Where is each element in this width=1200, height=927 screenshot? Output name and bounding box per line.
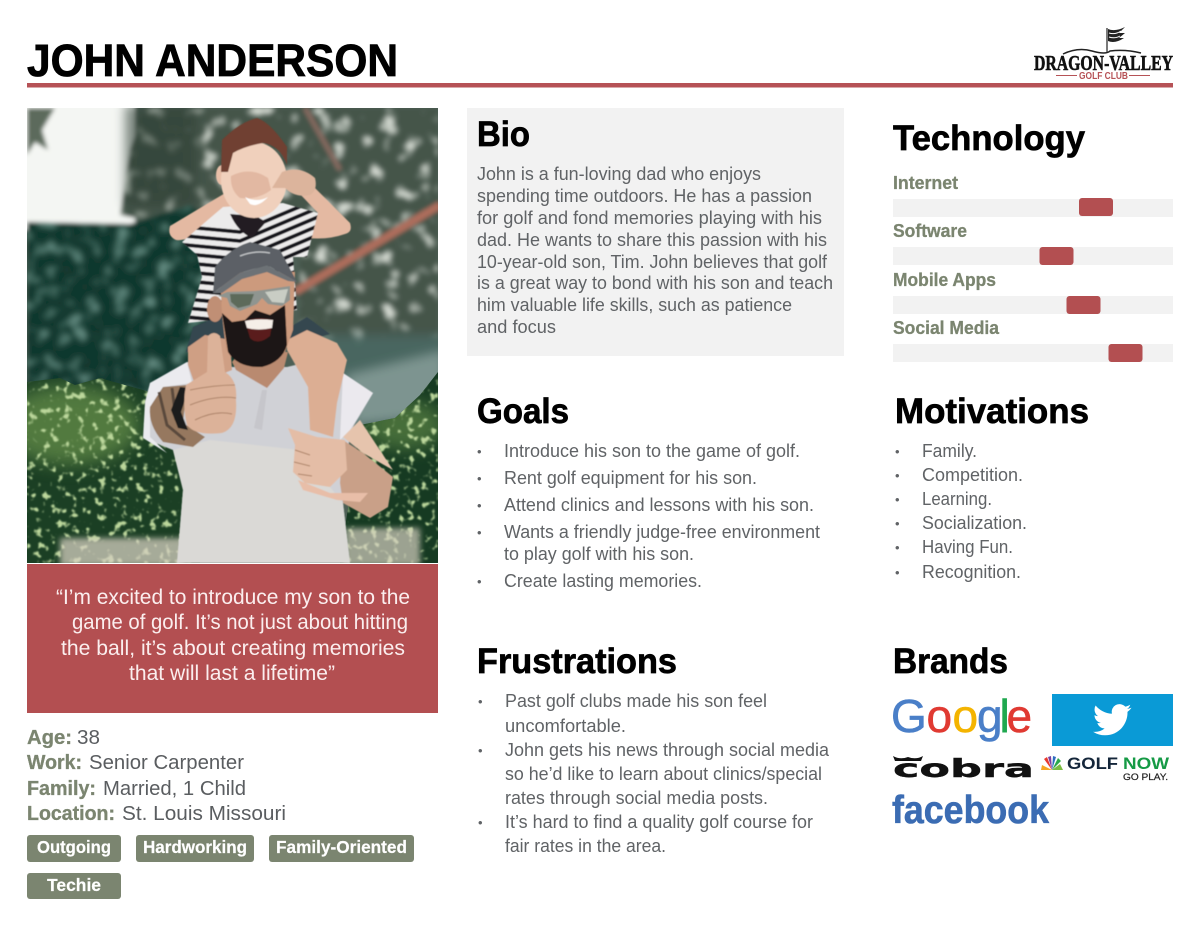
goals list: Attend clinics and lessons with his son.: [504, 494, 814, 515]
frustrations list: uncomfortable.: [505, 715, 626, 736]
quote text: “I’m excited to introduce my son to the: [56, 586, 410, 609]
father's sleeve: [143, 362, 192, 453]
demographics: Location:: [27, 803, 115, 825]
photo: father with son on shoulders: [27, 108, 438, 563]
motivations list: Socialization.: [922, 512, 1027, 533]
father's shirt: [149, 361, 371, 537]
quote text: game of golf. It’s not just about hitting: [72, 611, 408, 634]
brands heading: Brands: [893, 641, 1008, 681]
slider: Mobile Apps: [893, 296, 1173, 314]
bio text: 10-year-old son, Tim. John believes that golf: [477, 251, 828, 272]
brand: Google: e: [1006, 690, 1032, 742]
motivations list: Family.: [922, 440, 977, 461]
motivations list: •: [895, 492, 900, 507]
icon: flag: [1063, 27, 1141, 54]
tag: Outgoing: Outgoing: [37, 837, 111, 857]
bio heading: Bio: [477, 114, 530, 154]
frustrations heading: Frustrations: [477, 641, 677, 681]
motivations list: •: [895, 540, 900, 555]
father's right sleeve: [340, 373, 373, 440]
brand: Cobra: [893, 754, 1034, 783]
brand: Facebook: facebook: [892, 789, 1049, 832]
bio text: [477, 163, 833, 337]
frustrations list: John gets his news through social media: [505, 739, 830, 760]
photo background: [27, 108, 438, 563]
neck: [232, 352, 288, 388]
son: [169, 118, 351, 331]
tag: Outgoing: [27, 835, 121, 862]
label: Software: Software: [893, 221, 967, 241]
quote text: [56, 586, 410, 685]
bio text: for golf and fond memories playing with his: [477, 207, 822, 228]
frustrations list: Past golf clubs made his son feel: [505, 690, 767, 711]
tag: Hardworking: [136, 835, 254, 862]
motivations list: •: [895, 516, 900, 531]
tag: Family-Oriented: Family-Oriented: [276, 837, 407, 857]
frustrations list: rates through social media posts.: [505, 787, 768, 808]
frustrations list: [478, 690, 830, 856]
brand: Twitter: [1052, 694, 1173, 746]
motivations list: Having Fun.: [922, 536, 1013, 557]
slider: Social Media: [893, 344, 1173, 362]
tag: Techie: Techie: [47, 875, 101, 895]
brand: Google: G: [891, 690, 927, 742]
brand: Google: l: [1000, 690, 1010, 742]
goals list: Rent golf equipment for his son.: [504, 467, 757, 488]
bio text: dad. He wants to share this passion with his: [477, 229, 827, 250]
bio text: him valuable life skills, such as patience: [477, 294, 792, 315]
goals list: •: [477, 444, 482, 459]
demographics: Family:: [27, 778, 96, 800]
demographics: Work:: [27, 752, 82, 774]
brand: GolfNow: NOW: [1123, 754, 1170, 773]
shirt placket: [254, 390, 266, 430]
panel: bio: [467, 108, 844, 356]
tag: Techie: [27, 873, 121, 899]
foreground bushes: [0, 370, 445, 566]
motivations list: Competition.: [922, 464, 1023, 485]
technology heading: Technology: [893, 118, 1085, 158]
demographics: 38: [77, 727, 100, 749]
son's shorts: [186, 315, 330, 352]
goals list: •: [477, 471, 482, 486]
label: Social Media: Social Media: [893, 318, 1000, 338]
motivations list: •: [895, 468, 900, 483]
demographics: [27, 727, 286, 825]
bio text: and focus: [477, 316, 556, 337]
label: Internet: Internet: [893, 173, 958, 193]
son's right thigh and shin: [287, 330, 347, 437]
brand: Google: g: [977, 690, 1003, 742]
goals list: •: [477, 498, 482, 513]
brand: Google: o: [926, 690, 952, 742]
father's upper arm: [343, 420, 393, 470]
demographics: Age:: [27, 727, 72, 749]
demographics: Senior Carpenter: [89, 752, 244, 774]
header rule: [27, 83, 1173, 88]
frustrations list: •: [478, 694, 483, 709]
quote text: the ball, it’s about creating memories: [61, 637, 405, 660]
label: Mobile Apps: Mobile Apps: [893, 270, 996, 290]
frustrations list: so he’d like to learn about clinics/special: [505, 763, 822, 784]
frustrations list: •: [478, 743, 483, 758]
goals list: Introduce his son to the game of golf.: [504, 440, 800, 461]
logo subline: GOLF CLUB: [1079, 71, 1128, 82]
frustrations list: •: [478, 815, 483, 830]
icon: bird: [1093, 704, 1131, 735]
goals list: Wants a friendly judge-free environment: [504, 521, 820, 542]
motivations list: [895, 440, 1027, 582]
quote text: that will last a lifetime”: [129, 662, 335, 685]
brand: GolfNow: [1041, 754, 1170, 783]
father's head: [207, 242, 297, 367]
goals list: to play golf with his son.: [504, 543, 694, 564]
motivations list: Recognition.: [922, 561, 1021, 582]
slider: Software: [893, 247, 1173, 265]
bio text: John is a fun-loving dad who enjoys: [477, 163, 761, 184]
bio text: spending time outdoors. He has a passion: [477, 185, 812, 206]
motivations heading: Motivations: [895, 391, 1089, 431]
goals list: •: [477, 525, 482, 540]
demographics: St. Louis Missouri: [122, 803, 286, 825]
motivations list: •: [895, 444, 900, 459]
brand: GolfNow: GOLF: [1067, 754, 1118, 773]
brand: Cobra: cobra: [893, 754, 1034, 783]
frustrations list: It’s hard to find a quality golf course for: [505, 811, 813, 832]
motivations list: Learning.: [922, 488, 992, 509]
goals list: [477, 440, 820, 591]
son's left thigh: [188, 335, 232, 385]
brand: GolfNow: GO PLAY.: [1123, 772, 1168, 783]
technology chart: [893, 173, 1173, 362]
motivations list: •: [895, 565, 900, 580]
bio text: is a great way to bond with his son and teach: [477, 272, 833, 293]
slider: Internet: [893, 198, 1173, 217]
brand: Google: o: [952, 690, 978, 742]
goals heading: Goals: [477, 391, 569, 431]
tag: Hardworking: Hardworking: [143, 837, 247, 857]
title: JOHN ANDERSON: [27, 35, 398, 86]
demographics: Married, 1 Child: [103, 778, 246, 800]
father's other arm and hand: [288, 428, 393, 518]
icon: peacock: [1041, 756, 1063, 770]
quote box: [27, 564, 438, 713]
logo: Dragon Valley Golf Club: [1034, 27, 1173, 82]
figures: [143, 118, 393, 563]
father's shirt lower tone: [173, 440, 350, 563]
goals list: Create lasting memories.: [504, 570, 702, 591]
father's raised arm and thumbs-up: [150, 333, 236, 447]
son's right leg: [197, 432, 237, 519]
goals list: •: [477, 574, 482, 589]
tag: Family-Oriented: [269, 835, 414, 862]
frustrations list: fair rates in the area.: [505, 835, 666, 856]
